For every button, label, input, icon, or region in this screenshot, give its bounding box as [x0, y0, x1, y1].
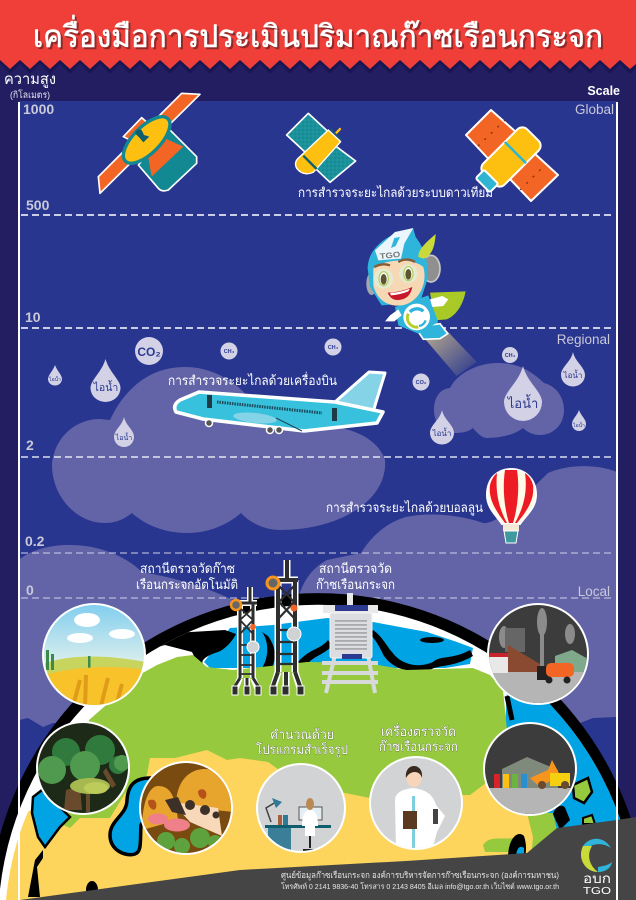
- altitude values: 0.2: [25, 533, 45, 549]
- scale labels: [557, 84, 620, 599]
- right ocean: [506, 694, 620, 828]
- title banner: เครื่องมือการประเมินปริมาณก๊าซเรือนกระจก: [33, 15, 603, 54]
- TGO logo: [581, 839, 612, 897]
- label: measuring device: [379, 723, 458, 754]
- gas bubbles and water drops: [48, 337, 586, 447]
- balloon label: การสำรวจระยะไกลด้วยบอลลูน: [326, 500, 483, 516]
- mascot: [366, 228, 477, 376]
- footer contact text: [281, 870, 559, 891]
- label: calculation software: คำนวณด้วย: [270, 727, 334, 742]
- altitude values: 500: [26, 197, 50, 213]
- title banner: เครื่องมือการประเมินปริมาณก๊าซเรือนกระจก: [35, 17, 605, 56]
- circle: waste depot: [483, 722, 578, 816]
- footer contact text: ศูนย์ข้อมูลก๊าซเรือนกระจก องค์การบริหารจัดการก๊าซเรือนกระจก (องค์การมหาชน): [281, 870, 559, 881]
- station labels left: สถานีตรวจวัดก๊าซ: [140, 561, 235, 576]
- altitude values: 10: [25, 309, 41, 325]
- altitude values: 0: [26, 582, 34, 598]
- altitude dashed lines: [21, 215, 614, 598]
- scale labels: Global: [575, 102, 614, 117]
- circle: office worker: [256, 763, 346, 853]
- gas bubbles and water drops: ไอน้ำ: [572, 420, 585, 429]
- gas bubbles and water drops: ไอน้ำ: [563, 369, 582, 380]
- satellite 1: [98, 93, 200, 193]
- station labels left: เรือนกระจกอัตโนมัติ: [136, 577, 238, 592]
- gas bubbles and water drops: CH₄: [224, 349, 235, 355]
- gas bubbles and water drops: CO₂: [416, 380, 427, 386]
- satellite label: การสำรวจระยะไกลด้วยระบบดาวเทียม: [298, 185, 493, 200]
- circle: factory: [487, 603, 590, 705]
- label: calculation software: โปรแกรมสำเร็จรูป: [256, 740, 348, 758]
- gas bubbles and water drops: ไอน้ำ: [48, 374, 61, 383]
- top coast squiggles: [147, 630, 473, 671]
- globe: [0, 590, 636, 900]
- gas bubbles and water drops: ไอน้ำ: [115, 431, 132, 442]
- hot air balloon: [487, 469, 536, 543]
- left drip tail: [28, 850, 43, 897]
- footer band: [20, 817, 636, 900]
- altitude values: [23, 101, 54, 598]
- circle: forest: [36, 721, 130, 815]
- yellow land: [6, 750, 533, 900]
- scale labels: Regional: [557, 332, 610, 347]
- top ocean: [204, 618, 473, 668]
- altitude values: 2: [26, 437, 34, 453]
- label: measuring device: ก๊าซเรือนกระจก: [379, 739, 458, 754]
- altitude values: 1000: [23, 101, 54, 117]
- gas bubbles and water drops: ไอน้ำ: [432, 427, 451, 438]
- satellite 2: [287, 113, 356, 182]
- gas bubbles and water drops: CH₄: [328, 345, 339, 351]
- tower 1: [231, 587, 261, 695]
- gas bubbles and water drops: CO₂: [137, 345, 161, 359]
- footer contact text: โทรศัพท์ 0 2141 9836-40 โทรสาร 0 2143 8405 อีเมล info@tgo.or.th เว็บไซต์ www.tgo.or.th: [281, 881, 559, 891]
- gas bubbles and water drops: ไอน้ำ: [93, 380, 118, 394]
- axis title: ความสูง: [4, 71, 56, 88]
- circle: livestock farm: [139, 761, 233, 855]
- center ocean blob: [110, 778, 150, 855]
- clouds: [19, 363, 617, 727]
- airplane: [175, 372, 385, 434]
- right land patches: [483, 838, 513, 852]
- TGO logo: อบก: [583, 871, 611, 886]
- mascot: TGO: [379, 250, 401, 261]
- airplane label: การสำรวจระยะไกลด้วยเครื่องบิน: [168, 372, 337, 388]
- circle: scientist: [369, 756, 463, 850]
- station labels right: ก๊าซเรือนกระจก: [316, 577, 395, 592]
- circle: wheat field: [42, 603, 146, 710]
- station labels right: [316, 561, 395, 592]
- gas bubbles and water drops: CH₄: [505, 353, 516, 359]
- TGO logo: TGO: [583, 885, 611, 897]
- tower 2: [267, 560, 304, 695]
- title banner: [0, 0, 636, 74]
- axis title: [4, 71, 56, 101]
- label: calculation software: [256, 727, 348, 758]
- scale labels: Local: [578, 584, 610, 599]
- satellite 3: [466, 110, 558, 201]
- axis title: (กิโลเมตร): [10, 89, 50, 101]
- label: measuring device: เครื่องตรวจวัด: [381, 723, 456, 739]
- left ocean drip: [32, 790, 70, 847]
- station labels right: สถานีตรวจวัด: [319, 561, 392, 576]
- station labels left: [136, 561, 238, 592]
- green land: [64, 655, 557, 850]
- scale labels: Scale: [587, 84, 620, 98]
- weather station box: [322, 593, 378, 693]
- gas bubbles and water drops: ไอน้ำ: [507, 394, 538, 411]
